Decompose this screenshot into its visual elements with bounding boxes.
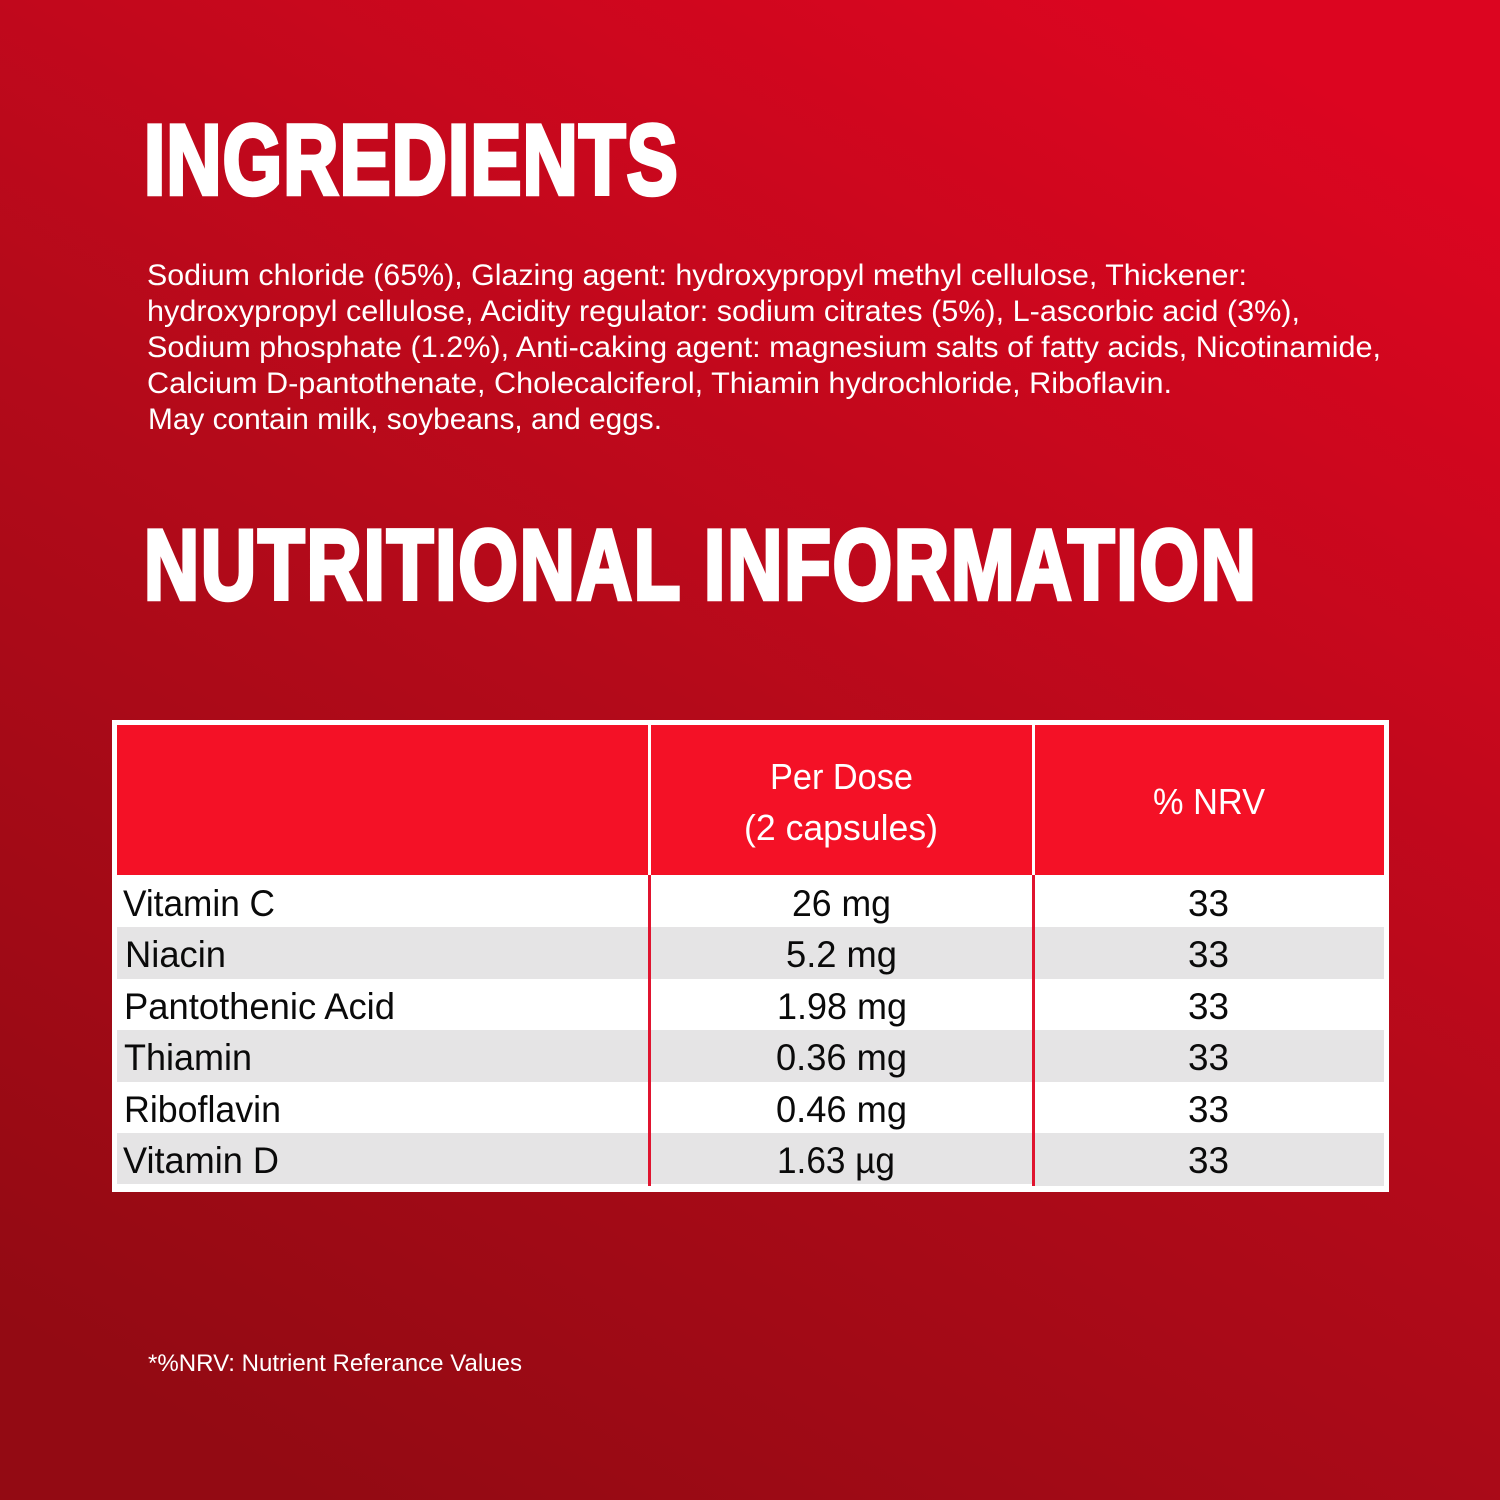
row: vitamin d: 1.63 µg bbox=[777, 1140, 895, 1181]
row: pantothenic acid: 1.98 mg bbox=[777, 986, 907, 1027]
table frame bbox=[112, 720, 1389, 1192]
footnote: *%NRV: Nutrient Referance Values bbox=[148, 1350, 522, 1377]
table header row: Per Dose bbox=[770, 756, 913, 797]
table header row bbox=[117, 725, 1384, 875]
row: thiamin: Thiamin bbox=[124, 1037, 252, 1078]
text block: ingredients list: hydroxypropyl cellulose, Acidity regulator: sodium citrates (5%), L-ascorbic acid (3%), bbox=[147, 295, 1300, 328]
row: riboflavin bbox=[124, 1089, 1229, 1130]
text block: ingredients list: Calcium D-pantothenate, Cholecalciferol, Thiamin hydrochloride, Riboflavin. bbox=[147, 367, 1172, 400]
nutrition table bbox=[112, 720, 1389, 1192]
row: pantothenic acid: Pantothenic Acid bbox=[124, 986, 395, 1027]
row: vitamin c: 26 mg bbox=[792, 883, 891, 924]
row: niacin: Niacin bbox=[125, 934, 226, 975]
text block: ingredients list bbox=[147, 259, 1381, 436]
row: vitamin c bbox=[123, 883, 1229, 924]
row: vitamin c: Vitamin C bbox=[123, 883, 275, 924]
row: niacin: 33 bbox=[1188, 934, 1229, 975]
row: niacin bbox=[125, 934, 1229, 975]
row: vitamin d bbox=[123, 1140, 1229, 1181]
row: thiamin: 33 bbox=[1188, 1037, 1229, 1078]
table header row: % NRV bbox=[1153, 781, 1265, 822]
heading: nutritional information: NUTRITIONAL INFORMATION bbox=[144, 509, 1256, 620]
table row stripes bbox=[117, 875, 1384, 1186]
row: pantothenic acid bbox=[124, 986, 1229, 1027]
row: thiamin bbox=[124, 1037, 1229, 1078]
table header row: (2 capsules) bbox=[744, 807, 938, 848]
text block: ingredients list: Sodium phosphate (1.2%), Anti-caking agent: magnesium salts of fatty acids, Nicotinamide, bbox=[147, 331, 1381, 364]
row: riboflavin: 33 bbox=[1188, 1089, 1229, 1130]
text block: ingredients list: May contain milk, soybeans, and eggs. bbox=[148, 403, 662, 436]
row: vitamin d: 33 bbox=[1188, 1140, 1229, 1181]
row: vitamin d: Vitamin D bbox=[123, 1140, 279, 1181]
heading: ingredients: INGREDIENTS bbox=[144, 104, 678, 215]
row: riboflavin: 0.46 mg bbox=[776, 1089, 907, 1130]
row: vitamin c: 33 bbox=[1188, 883, 1229, 924]
row: thiamin: 0.36 mg bbox=[776, 1037, 907, 1078]
text block: ingredients list: Sodium chloride (65%), Glazing agent: hydroxypropyl methyl cellulose, Thickener: bbox=[147, 259, 1247, 292]
row: riboflavin: Riboflavin bbox=[124, 1089, 281, 1130]
row: pantothenic acid: 33 bbox=[1188, 986, 1229, 1027]
row: niacin: 5.2 mg bbox=[786, 934, 897, 975]
